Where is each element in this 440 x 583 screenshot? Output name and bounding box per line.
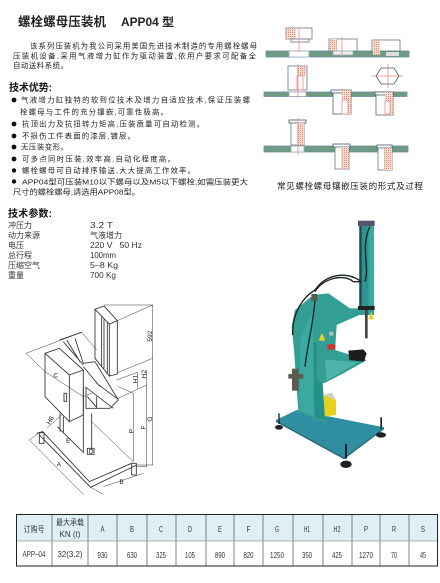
dimension drawing: isometric machine outline [26, 305, 154, 494]
table header text: 订购号 [24, 524, 44, 534]
table data row: 105 [185, 551, 195, 560]
cylinder [359, 225, 374, 308]
table data row: 890 [215, 551, 225, 560]
intro paragraph: 压装机设备,采用气液增力缸作为驱动装置,依用户要求可配备全 [13, 52, 257, 60]
feet [275, 413, 386, 468]
advantages list: 尺寸的螺栓螺母,请选用APP08型。 [13, 188, 140, 196]
diagram: nut and bolt press-in forms [264, 28, 409, 170]
table header text: E [218, 525, 222, 534]
table header background [16, 514, 438, 541]
table header text: H1 [304, 525, 310, 534]
advantages list: APP04型可压装M10以下螺母以及M5以下螺栓,如需压装更大 [22, 178, 249, 186]
machine photo [275, 221, 386, 468]
dimension lines [26, 305, 153, 494]
dimension drawing: isometric machine outline: 592 [147, 330, 154, 342]
frame [59, 332, 83, 365]
advantages list: 气液增力缸独特的软到位技术及增力自适应技术,保证压装螺 [21, 96, 251, 104]
heading: advantages: 技术优势: [9, 81, 52, 94]
dimension drawing: isometric machine outline: E [66, 438, 71, 445]
table data row: 630 [127, 551, 137, 560]
intro paragraph: 该系列压装机为我公司采用美国先进技术制造的专用螺栓螺母 [30, 42, 257, 50]
table data row: 1270 [359, 551, 373, 560]
row 2: plate with nuts [264, 64, 407, 115]
dimension drawing: isometric machine outline: D [89, 448, 94, 455]
dimension drawing: isometric machine outline: A [57, 462, 62, 469]
table header text: S [421, 525, 425, 534]
advantages list [12, 96, 251, 196]
column and arm [292, 293, 374, 423]
advantages list: 可多点同时压装,效率高,自动化程度高。 [22, 154, 175, 164]
table header text: C [159, 525, 163, 534]
table data row: 70 [391, 551, 397, 560]
lower arm [317, 340, 367, 383]
advantages list: 抗顶出力及抗扭转力矩高,压装质量可自动检测。 [22, 120, 204, 128]
advantages list: 无压装变形。 [21, 142, 68, 152]
table data row: 45 [420, 551, 426, 560]
title: 螺栓螺母压装机 [18, 14, 107, 29]
dimension drawing: isometric machine outline: H2 [141, 370, 148, 378]
title: APP04 型 [121, 16, 174, 29]
dimension drawing: isometric machine outline: F [140, 425, 147, 429]
parameters list: 动力来源 [8, 230, 40, 240]
table grid [16, 514, 438, 566]
yellow foot switch [324, 395, 336, 417]
dimension drawing: isometric machine outline: B [119, 479, 124, 486]
parameters list: 气液增力 [90, 230, 122, 240]
intro paragraph: 自动送料系统。 [13, 61, 68, 70]
dimension drawing: isometric machine outline: H6 [46, 415, 56, 426]
heading: technical parameters: 技术参数: [8, 207, 52, 220]
parameters list: 100mm [90, 251, 116, 260]
table data row: APP–04 [22, 550, 46, 559]
row 1: plate with bolts [266, 28, 409, 57]
table header text: KN (t) [60, 530, 81, 539]
parameters list: 220 V 50 Hz [90, 241, 142, 250]
table data row: 930 [98, 551, 108, 560]
intro paragraph [13, 42, 257, 70]
dimension drawing: isometric machine outline: G [147, 416, 154, 422]
table header text: H2 [334, 525, 341, 534]
table data row: 350 [302, 551, 312, 560]
specification table [16, 514, 438, 566]
air regulator [288, 294, 317, 391]
table header text [24, 517, 425, 539]
hoses [293, 227, 370, 367]
advantages list: 螺栓螺母可自动排序输送,大大提高工作效率。 [22, 166, 195, 175]
table header text: B [130, 525, 134, 534]
title [18, 14, 174, 29]
table data row: 32(3.2) [58, 550, 83, 559]
table header text: A [100, 525, 105, 534]
table header text: P [364, 525, 368, 534]
table data row: 325 [156, 551, 166, 560]
parameters list: 5–8 Kg [90, 261, 118, 270]
advantages list: 不损伤工件表面的漆层,镀层。 [22, 132, 135, 140]
parameters list: 重量 [8, 270, 24, 280]
cylinder [95, 306, 117, 376]
table data row: 820 [244, 551, 254, 560]
warning labels [319, 333, 325, 341]
anvil [348, 349, 367, 362]
table header text: F [246, 525, 251, 534]
parameters list: 700 Kg [90, 271, 116, 280]
diagram caption: 常见螺栓螺母镶嵌压装的形式及过程 [277, 180, 423, 191]
parameters list: 电压 [8, 240, 24, 250]
parameters list: 冲压力 [8, 220, 32, 230]
table header text: 最大承载 [56, 517, 84, 527]
table header text: R [392, 525, 396, 534]
dimension drawing: isometric machine outline: C [53, 372, 58, 379]
table header text: G [275, 525, 279, 534]
table data row: 425 [332, 551, 342, 560]
parameters list: 3.2 T [90, 221, 113, 230]
advantages list: 栓螺母与工件的充分镶嵌,可靠性极高。 [20, 108, 168, 116]
dimension drawing: isometric machine outline: H1 [132, 375, 139, 383]
dimension drawing: isometric machine outline: P [128, 428, 135, 433]
parameters list [8, 220, 142, 280]
table data row [22, 550, 426, 560]
table data row: 1250 [270, 551, 284, 560]
parameters list: 压缩空气 [8, 260, 40, 270]
base plate [276, 410, 384, 457]
cabinet [45, 348, 83, 422]
parameters list: 总行程 [8, 250, 32, 260]
table header text: D [188, 525, 192, 534]
row 3: plate with flanged nuts [264, 118, 408, 170]
